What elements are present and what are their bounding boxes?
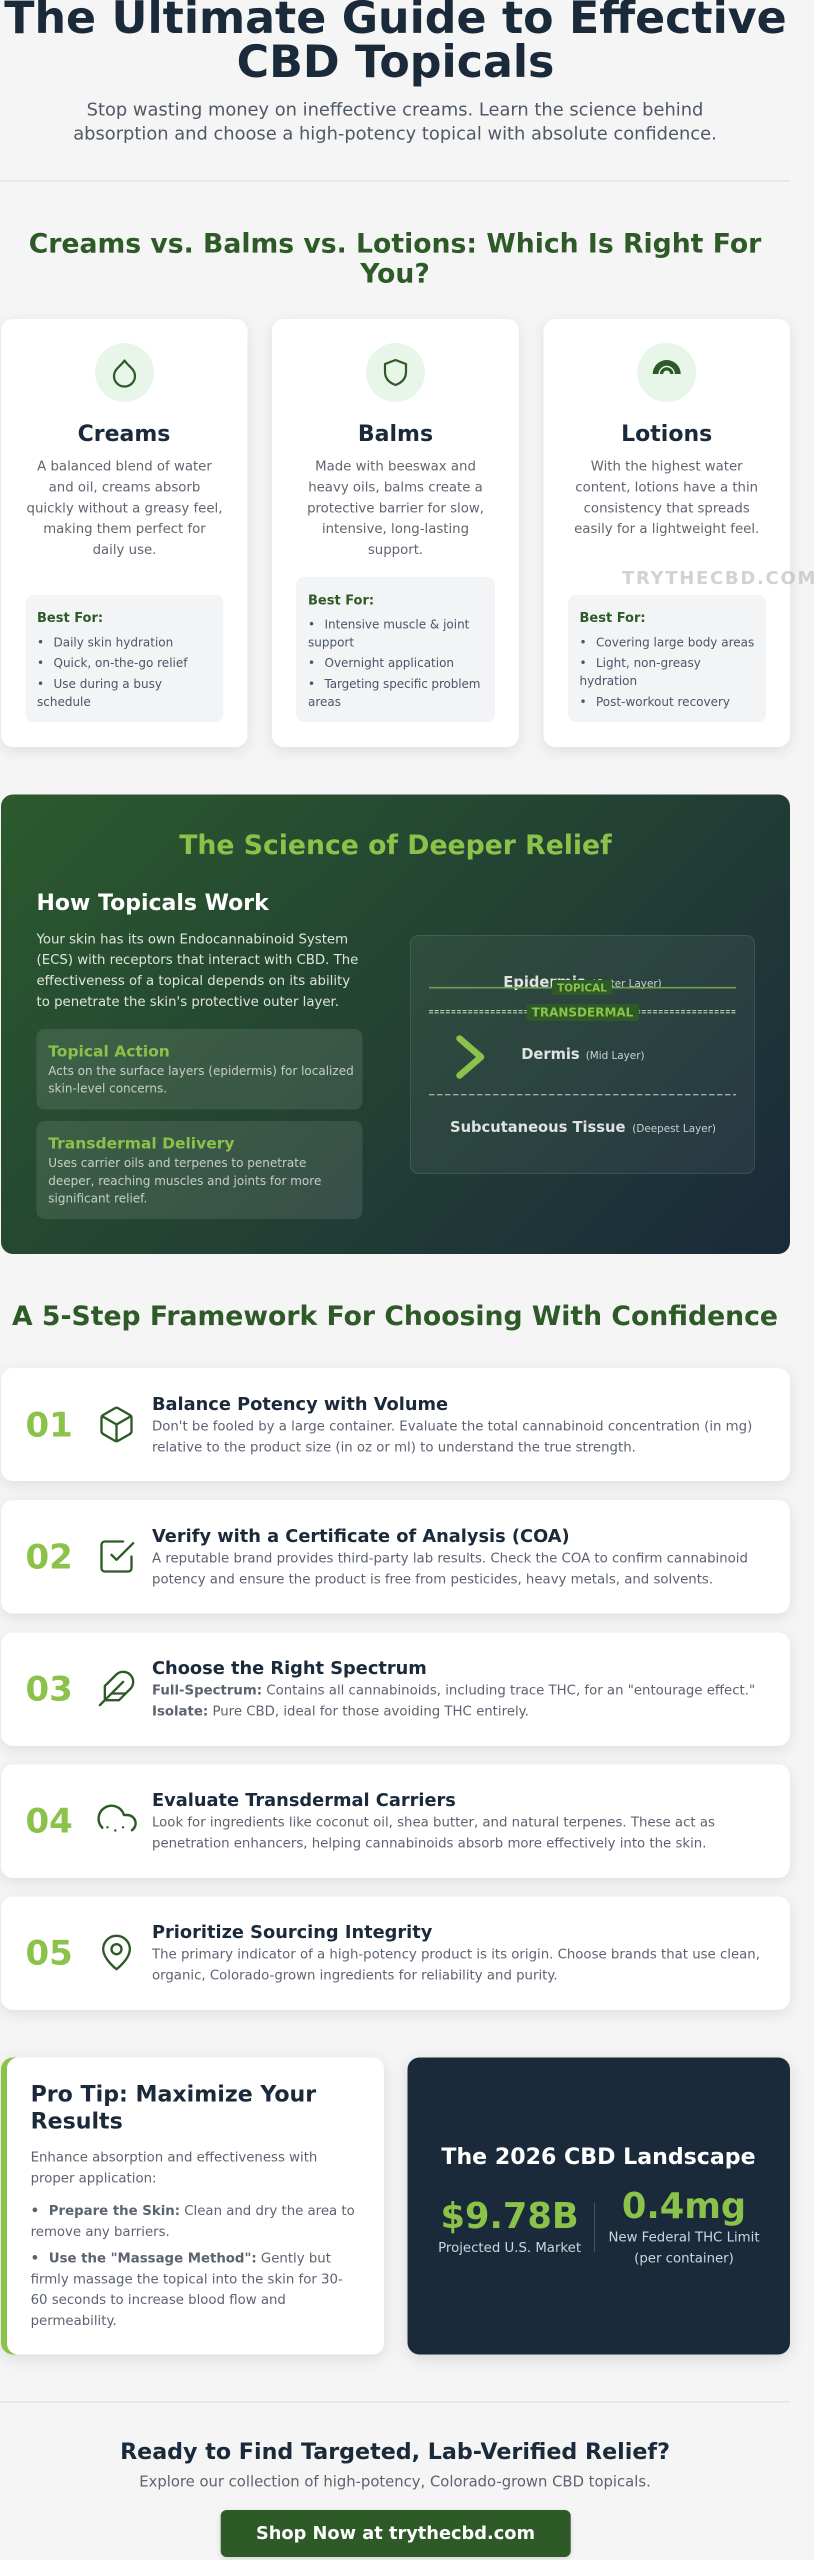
panel: creams (1, 319, 248, 747)
best for list: Intensive muscle & joint (324, 618, 470, 632)
panel: pro tip (1, 2058, 384, 2354)
step 05: organic, Colorado-grown ingredients for reliability and purity. (152, 1968, 558, 1984)
best for list: • (37, 656, 44, 670)
card description (307, 460, 484, 558)
step 04: 04 (26, 1802, 73, 1842)
card description (574, 460, 759, 537)
panel: 2026 cbd landscape (408, 2058, 790, 2354)
step 05: 05 (26, 1934, 73, 1974)
pro tip title: Results (31, 2109, 123, 2135)
how topicals work text (36, 932, 358, 1010)
step 02: Verify with a Certificate of Analysis (COA) (152, 1526, 570, 1547)
card description: daily use. (93, 543, 156, 558)
card description: quickly without a greasy feel, (27, 501, 222, 516)
step 04: Look for ingredients like coconut oil, shea butter, and natural terpenes. These act as (152, 1816, 715, 1831)
heading: creams vs balms vs lotions: You? (359, 259, 430, 290)
best for list: • (308, 656, 315, 670)
button: shop now (221, 2510, 571, 2557)
icon: rainbow (637, 343, 696, 402)
best for list: Light, non-greasy (596, 656, 701, 670)
pro tip list: permeability. (31, 2314, 117, 2329)
subtitle: absorption and choose a high-potency topical with absolute confidence. (73, 123, 717, 144)
layer: dermis (521, 1046, 645, 1063)
stat: projected market: $9.78B (441, 2196, 579, 2237)
pro tip list: firmly massage the topical into the skin for 30- (31, 2272, 343, 2287)
callout: transdermal delivery: significant relief. (48, 1192, 147, 1206)
icon: map pin (103, 1936, 130, 1969)
layer: epidermis: (Outer Layer) (592, 978, 662, 990)
watermark: TRYTHECBD.COM (622, 568, 814, 589)
step 04 (1, 1764, 790, 1878)
callout: topical action: Acts on the surface layers (epidermis) for localized (48, 1064, 354, 1078)
best for list: Overnight application (324, 656, 454, 670)
icon: box (102, 1408, 132, 1441)
pro tip intro (31, 2151, 317, 2186)
best for list (26, 595, 224, 722)
step 03: Full-Spectrum: Contains all cannabinoids, including trace THC, for an "entourage effect." (152, 1684, 755, 1699)
icon: droplet (95, 343, 154, 402)
best for list: schedule (37, 695, 91, 709)
layer: dermis: (Mid Layer) (586, 1050, 645, 1062)
step 01: relative to the product size (in oz or ml) to understand the true strength. (152, 1440, 636, 1456)
best for list: • (37, 635, 44, 649)
step 03: 03 (26, 1670, 73, 1710)
layer: dermis: Dermis (521, 1046, 580, 1063)
callout: transdermal delivery: Transdermal Delivery (48, 1135, 234, 1153)
best for list: • (580, 656, 587, 670)
layer: epidermis: Epidermis (503, 974, 586, 991)
best for list: Use during a busy (54, 677, 162, 691)
card description: heavy oils, balms create a (308, 480, 483, 496)
best for list: Best For: (580, 611, 646, 626)
step 02 (1, 1500, 790, 1614)
step 05: Prioritize Sourcing Integrity (152, 1922, 433, 1943)
icon: shield (366, 343, 425, 402)
step 02: potency and ensure the product is free from pesticides, heavy metals, and solvents. (152, 1572, 713, 1588)
card description: easily for a lightweight feel. (574, 522, 759, 537)
best for list: Best For: (308, 593, 374, 608)
title: CBD Topicals (237, 37, 554, 88)
stat: projected market: Projected U.S. Market (438, 2241, 581, 2256)
best for list: Quick, on-the-go relief (54, 656, 188, 670)
diagram: skin layers (410, 936, 754, 1174)
layer: subcutaneous tissue: (Deepest Layer) (632, 1123, 716, 1135)
card description: With the highest water (591, 460, 743, 475)
pro tip intro: proper application: (31, 2171, 157, 2186)
icon: cloud (99, 1806, 136, 1832)
pro tip title (31, 2082, 316, 2135)
icon: check square (102, 1542, 133, 1572)
best for list (296, 577, 495, 722)
heading: 5-step framework: A 5-Step Framework For Choosing With Confidence (12, 1301, 778, 1332)
pro tip list: Prepare the Skin: Clean and dry the area to (49, 2204, 355, 2219)
step 03 (1, 1632, 790, 1746)
best for list: Targeting specific problem (324, 677, 480, 691)
card description: Made with beeswax and (315, 460, 476, 475)
panel: science of deeper relief (1, 794, 790, 1254)
heading: creams vs balms vs lotions: Creams vs. Balms vs. Lotions: Which Is Right For (29, 229, 762, 260)
pro tip list: 60 seconds to increase blood flow and (31, 2293, 286, 2308)
landscape title: The 2026 CBD Landscape (441, 2144, 756, 2170)
best for list: • (308, 677, 315, 691)
how topicals work text: to penetrate the skin's protective outer layer. (36, 995, 339, 1010)
label: transdermal: TRANSDERMAL (532, 1006, 634, 1020)
stat: projected market (438, 2196, 581, 2256)
card description: and oil, creams absorb (49, 480, 200, 496)
card description: A balanced blend of water (37, 460, 212, 475)
icon: feather (100, 1672, 133, 1705)
call to action text: Explore our collection of high-potency, Colorado-grown CBD topicals. (139, 2474, 651, 2491)
card description: consistency that spreads (584, 501, 750, 516)
label: topical (552, 980, 612, 995)
call to action heading: Ready to Find Targeted, Lab-Verified Relief? (120, 2439, 670, 2465)
best for list: Post-workout recovery (596, 695, 730, 709)
pro tip list (31, 2204, 355, 2329)
layer: subcutaneous tissue: Subcutaneous Tissue (450, 1119, 625, 1136)
card description: support. (368, 543, 423, 558)
label: topical: TOPICAL (557, 983, 607, 995)
card description: intensive, long-lasting (322, 522, 469, 537)
stat: federal thc limit: (per container) (634, 2251, 734, 2266)
title (4, 0, 787, 88)
pro tip list: • (31, 2251, 39, 2266)
callout: topical action (36, 1029, 362, 1110)
card title: Balms (358, 422, 433, 447)
best for list: Covering large body areas (596, 635, 754, 649)
step 02: 02 (26, 1538, 73, 1578)
step 01 (1, 1368, 790, 1481)
step 01: Don't be fooled by a large container. Evaluate the total cannabinoid concentration (in mg) (152, 1420, 752, 1435)
card description (27, 460, 222, 558)
pro tip list: Use the "Massage Method": Gently but (49, 2251, 331, 2266)
best for list: • (37, 677, 44, 691)
pro tip list: • (31, 2204, 39, 2219)
heading: creams vs balms vs lotions (29, 229, 762, 290)
step 03: Choose the Right Spectrum (152, 1658, 427, 1679)
button: shop now: Shop Now at trythecbd.com (256, 2523, 535, 2544)
best for list (568, 595, 766, 722)
best for list: support (308, 636, 354, 650)
callout: transdermal delivery: deeper, reaching muscles and joints for more (48, 1174, 321, 1188)
best for list: Best For: (37, 611, 103, 626)
stat: federal thc limit: 0.4mg (622, 2186, 746, 2227)
layer: epidermis (503, 974, 662, 991)
science heading: The Science of Deeper Relief (179, 830, 612, 861)
card description: making them perfect for (43, 522, 206, 537)
step 01: 01 (26, 1406, 73, 1446)
step 03: Isolate: Pure CBD, ideal for those avoiding THC entirely. (152, 1704, 529, 1720)
best for list: • (580, 635, 587, 649)
step 02: A reputable brand provides third-party lab results. Check the COA to confirm cannabinoid (152, 1552, 748, 1567)
step 05 (1, 1896, 790, 2010)
step 04: penetration enhancers, helping cannabinoids absorb more effectively into the skin. (152, 1836, 706, 1852)
how topicals work text: Your skin has its own Endocannabinoid System (36, 932, 348, 947)
layer: subcutaneous tissue (450, 1119, 716, 1136)
best for list: areas (308, 695, 341, 709)
stat: federal thc limit (608, 2186, 760, 2266)
how topicals work text: effectiveness of a topical depends on its ability (36, 974, 350, 989)
panel: balms (272, 319, 519, 747)
callout: transdermal delivery: Uses carrier oils and terpenes to penetrate (48, 1156, 306, 1170)
how topicals work text: (ECS) with receptors that interact with CBD. The (36, 953, 358, 968)
best for list: • (580, 695, 587, 709)
best for list: Daily skin hydration (54, 635, 173, 649)
callout: transdermal delivery (36, 1121, 362, 1219)
card description: content, lotions have a thin (575, 480, 758, 496)
subtitle: Stop wasting money on ineffective creams. Learn the science behind (87, 99, 703, 120)
step 04: Evaluate Transdermal Carriers (152, 1790, 456, 1811)
card description: protective barrier for slow, (307, 501, 484, 516)
pro tip intro: Enhance absorption and effectiveness with (31, 2151, 317, 2166)
subtitle (73, 99, 717, 144)
panel: lotions (544, 319, 790, 747)
callout: topical action: skin-level concerns. (48, 1082, 167, 1096)
step 05: The primary indicator of a high-potency product is its origin. Choose brands that use clean, (151, 1948, 760, 1963)
stat: federal thc limit: New Federal THC Limit (608, 2231, 760, 2246)
card title: Lotions (621, 422, 712, 447)
pro tip list: remove any barriers. (31, 2225, 170, 2240)
callout: topical action: Topical Action (48, 1043, 170, 1061)
step 01: Balance Potency with Volume (152, 1394, 448, 1415)
arrow: penetration chevron (460, 1038, 481, 1076)
best for list: • (308, 618, 315, 632)
card title: Creams (78, 422, 170, 447)
best for list: hydration (580, 674, 637, 688)
pro tip title: Pro Tip: Maximize Your (31, 2082, 316, 2108)
how topicals work heading: How Topicals Work (36, 891, 270, 916)
